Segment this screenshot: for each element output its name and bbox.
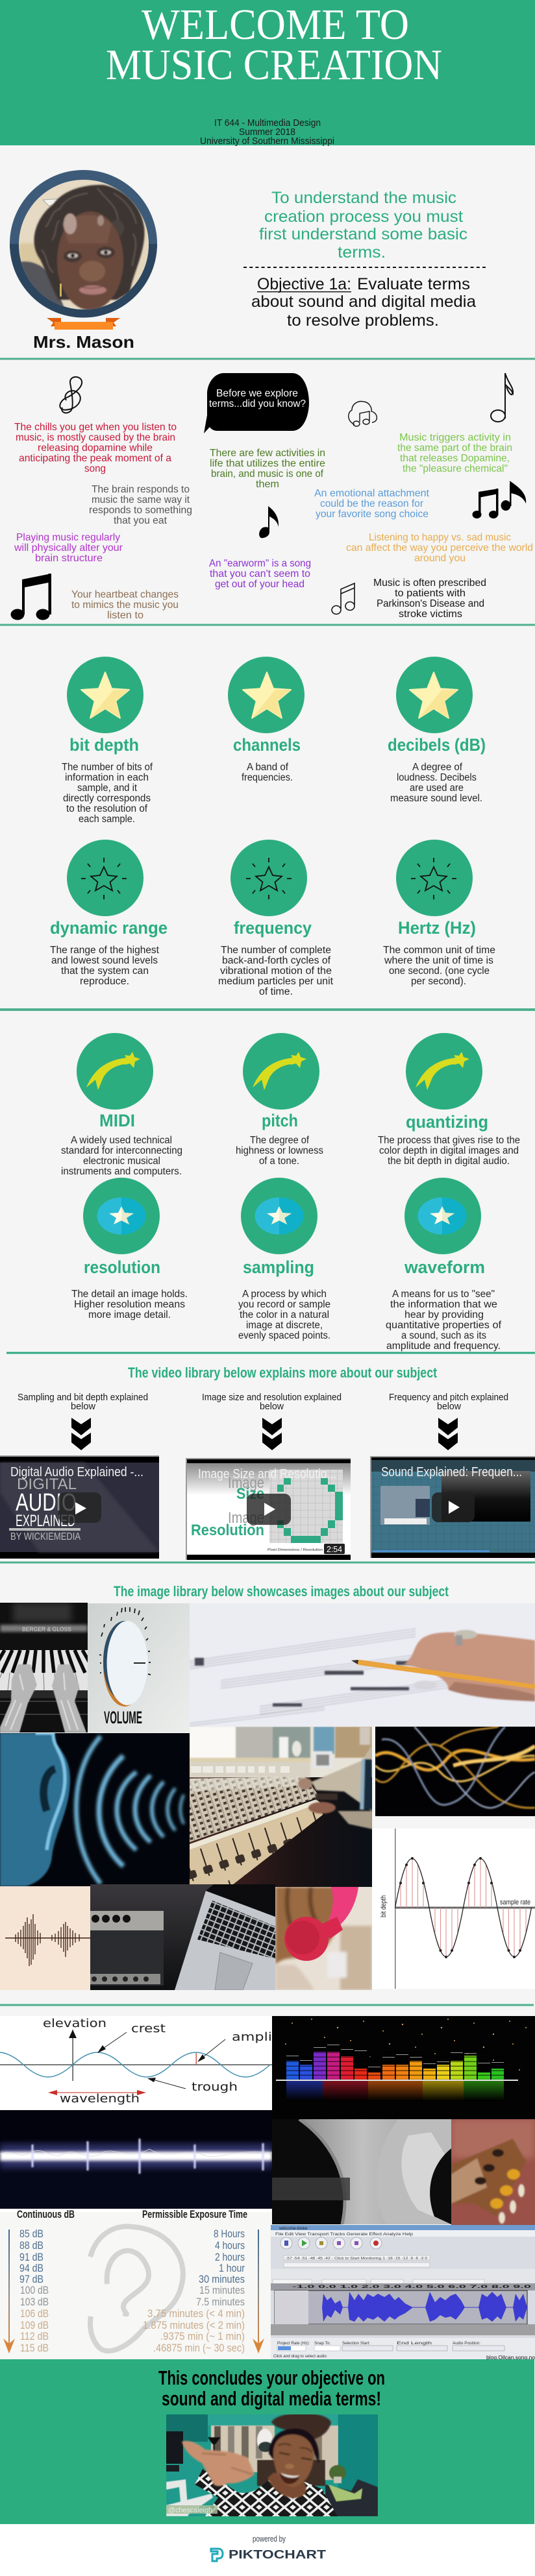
table image: permissible exposure time: 3.75 minutes (< 4 min) [147,2307,245,2320]
fact: chills: The chills you get when you listen to [14,422,177,433]
fact: brain responds: that you eat [114,515,168,526]
table image: permissible exposure time: Continuous dB [17,2208,75,2220]
icon: beamed notes filled [10,574,51,620]
table image: permissible exposure time: 15 minutes [199,2284,245,2296]
definition: more image detail. [88,1309,171,1320]
definition: The range of the highest [50,945,160,956]
course details: IT 644 - Multimedia Design [214,117,321,128]
fact: emotional attachment: An emotional attachment [314,488,430,499]
definition [50,945,160,987]
table image: permissible exposure time: 7.5 minutes [196,2296,245,2308]
fact: dopamine: Music triggers activity in [399,432,511,443]
panel: header [0,0,535,147]
definition: Higher resolution means [74,1299,185,1310]
powered by: powered by [253,2534,286,2544]
caption: video 2 [202,1392,342,1412]
definition: and lowest sound levels [51,955,158,966]
fact: earworm: An "earworm" is a song [209,558,311,569]
icon: blue star badge [241,1178,317,1254]
fact: playing music: Playing music regularly [16,532,120,543]
panel: term sampling [238,1178,330,1341]
definition: you record or sample [238,1299,330,1310]
definition: per second). [411,976,466,987]
definition: electronic musical [83,1156,160,1167]
fact: brain responds [89,484,192,526]
icon: pair of notes [473,481,526,518]
diagram image: wave anatomy: ampli [232,2030,272,2044]
definition: reproduce. [80,976,129,987]
table image: permissible exposure time: 97 dB [19,2273,44,2285]
table image: permissible exposure time: 112 dB [20,2330,49,2342]
definition [383,945,495,987]
definition: A band of [247,762,289,773]
video thumbnail: image size and resolution: Pixel Dimensions / Resolution [268,1548,323,1552]
panel: term MIDI [61,1033,182,1177]
fact: playing music [14,532,123,564]
fact: happy vs sad: Listening to happy vs. sad music [369,532,511,543]
instructor name: Mrs. Mason [33,332,134,352]
piktochart wordmark: PIKTOCHART [229,2548,326,2561]
icon: outline star badge [67,840,143,916]
icon: ribbon [47,318,120,330]
fact: heartbeat [71,589,179,621]
definition: loudness. Decibels [397,772,477,783]
diagram image: wave anatomy: elevation [43,2017,106,2030]
title [106,1,442,89]
definition: A widely used technical [71,1135,172,1146]
definition: instruments and computers. [61,1166,182,1177]
diagram image: wave anatomy: crest [131,2022,166,2035]
table image: permissible exposure time: 1.875 minutes (< 2 min) [143,2319,245,2331]
photo: golden sound waves [375,1727,535,1816]
video thumbnail: digital audio explained: DIGITAL [17,1476,77,1493]
icon: blue star badge [404,1178,481,1254]
definition: The detail an image holds. [71,1289,188,1300]
definition [378,1135,520,1167]
panel: did you know facts [10,373,533,621]
fact: chills: song [84,463,106,474]
definition [61,1135,182,1177]
table image: permissible exposure time: .46875 min (~ 30 sec) [153,2342,245,2354]
diagram image: wave anatomy [0,2016,272,2110]
definition: A means for us to "see" [392,1289,495,1300]
definition: medium particles per unit [218,976,334,987]
text: intro: creation process you must [264,208,463,226]
definition: a sound, such as its [401,1330,486,1341]
photo: piano hands: BERGER & GLOSS [22,1626,71,1633]
fact: prescribed: Music is often prescribed [373,577,486,589]
photo: laptop and audio mixer [90,1884,275,1990]
fact: brain responds: music the same way it [92,494,190,505]
photo: equalizer [272,2016,535,2119]
definition: The common unit of time [383,945,495,956]
definition: the information that we [390,1299,497,1310]
term heading: waveform [404,1258,485,1277]
text: intro [259,189,467,261]
term heading: dynamic range [50,918,168,938]
icon: outline star badge [230,840,307,916]
panel: term pitch [236,1033,323,1167]
photo: volume knob [88,1603,190,1732]
panel: footer [0,2524,535,2576]
caption: video 1 [18,1392,148,1412]
photo: guitar headstock [451,2119,535,2225]
video thumbnail: sound explained [370,1456,535,1558]
icon: outline star badge [396,840,473,916]
caption: video 3: below [437,1402,462,1412]
fact: happy vs sad: around you [414,553,466,564]
fact: playing music: will physically alter your [14,542,123,553]
definition: A degree of [412,762,463,773]
video thumbnail: image size and resolution [186,1458,351,1560]
video thumbnail: digital audio explained [0,1455,159,1559]
panel: term quantizing [378,1033,520,1167]
video thumbnail: image size and resolution: Image [228,1509,264,1527]
screenshot: audacity editor: blog.Oilcan.song.no [486,2355,535,2361]
definition [218,945,334,997]
definition: information in each [65,772,149,783]
table image: permissible exposure time: 94 dB [19,2262,44,2274]
term heading: sampling [243,1258,314,1277]
photo: beige sound wave [0,1886,90,1990]
text: objective: to resolve problems. [287,311,439,330]
course details [200,117,334,147]
term heading: resolution [84,1258,160,1277]
text: intro: terms. [338,243,386,261]
panel: term bit depth [62,657,153,825]
fact: entire brain [210,448,325,490]
definition: A process by which [242,1289,327,1300]
screenshot: audacity editor: Snap To: [314,2342,330,2346]
table image: permissible exposure time: 4 hours [215,2239,245,2252]
video thumbnail: image size and resolution: Resolution [191,1522,264,1539]
definition: The degree of [250,1135,310,1146]
icon: quaver center [259,506,279,538]
fact: prescribed: Parkinson's Disease and [377,598,484,609]
definition: the color in a natural [240,1309,329,1320]
definition [236,1135,323,1167]
definition: back-and-forth cycles of [222,955,331,966]
text: intro: first understand some basic [259,225,467,243]
icon: outlined note [491,373,513,422]
photo: woman waving [166,2414,378,2516]
table image: permissible exposure time: 109 dB [20,2319,49,2331]
fact: brain responds: responds to something [89,505,192,516]
photo: mixing console [190,1727,372,1887]
caption: video 2: Image size and resolution explained [202,1392,342,1403]
definition: vibrational motion of the [220,966,332,977]
caption: video 2: below [260,1402,284,1412]
screenshot: audacity editor: -57 -54 -51 -48 -45 -42 - Click to Start Monitoring 1 -18 -15 -12 -9 -6 -3 0 [286,2257,427,2261]
fact: dopamine: the "pleasure chemical" [403,463,508,474]
text: objective: Objective 1a: [257,275,351,293]
fact: chills: anticipating the peak moment of a [19,453,171,464]
table image: permissible exposure time [0,2208,271,2354]
caption: video 1: Sampling and bit depth explained [18,1392,148,1403]
definition: The number of bits of [62,762,153,773]
text: objective [251,275,476,330]
definition [242,762,293,783]
conclusion heading: sound and digital media terms! [162,2387,381,2410]
conclusion heading: This concludes your objective on [158,2366,385,2389]
fact: happy vs sad [346,532,533,564]
term heading: MIDI [99,1111,135,1130]
heading: image library: The image library below showcases images about our subject [114,1583,449,1599]
definition: image at discrete, [246,1320,323,1331]
panel: term hertz [383,840,495,987]
video thumbnail: image size and resolution: Image [228,1474,264,1492]
term heading: decibels (dB) [388,735,486,755]
icon: treble clef [60,377,82,413]
panel: conclusion [0,2359,534,2524]
fact: prescribed: stroke victims [399,609,462,620]
definition: The process that gives rise to the [378,1135,520,1146]
heading: video library: The video library below explains more about our subject [128,1365,438,1381]
photo: woman waving: @chescaleigh [168,2507,212,2514]
fact: emotional attachment [314,488,430,520]
fact: prescribed [373,577,486,620]
diagram image: wave anatomy: wavelength [60,2092,140,2106]
term heading: frequency [234,918,312,938]
text: intro: To understand the music [271,189,456,207]
arrow: chevrons 2 [262,1418,282,1450]
definition: that the system can [61,966,149,977]
screenshot: audacity editor: Project Rate (Hz): [277,2342,310,2346]
fact: earworm: that you can't seem to [210,568,310,579]
text: objective: about sound and digital media [251,293,476,311]
term heading: bit depth [69,735,139,755]
conclusion heading [158,2366,385,2410]
fact: heartbeat: to mimics the music you [71,600,179,611]
panel: term frequency [218,840,334,997]
title: MUSIC CREATION [106,41,442,89]
screenshot: audacity editor: Audio Position: [453,2342,480,2346]
definition [390,762,482,804]
definition: evenly spaced points. [238,1330,330,1341]
term heading: channels [233,735,301,755]
icon: comet badge [77,1033,153,1110]
course details: Summer 2018 [239,127,295,138]
table image: permissible exposure time: 2 hours [215,2251,245,2263]
video thumbnail: digital audio explained: BY WICKIEMEDIA [10,1531,81,1542]
photo: red headphones [275,1887,372,1990]
screenshot: audacity editor: End Length [397,2342,432,2346]
panel: term dynamic range [50,840,168,987]
video thumbnail: digital audio explained: Digital Audio Explained -... [10,1465,143,1479]
fact: entire brain: them [256,479,279,490]
definition: color depth in digital images and [379,1145,519,1156]
panel: term resolution [71,1178,188,1320]
term heading: quantizing [406,1112,488,1132]
definition: the bit depth in digital audio. [388,1156,510,1167]
definition: hear by providing [404,1309,484,1320]
icon: star badge [228,657,305,733]
fact: chills: releasing dopamine while [38,443,153,454]
callout: speech bubble: terms...did you know? [209,398,306,409]
table image: permissible exposure time: 91 dB [19,2251,44,2263]
icon: cloud with notes [349,402,377,426]
arrow: chevrons 1 [71,1418,91,1450]
definition: amplitude and frequency. [386,1341,501,1352]
table image: permissible exposure time: 88 dB [19,2239,44,2252]
fact: dopamine: that releases Dopamine, [400,453,510,464]
fact: dopamine [397,432,512,474]
definition: each sample. [79,814,135,825]
definition: frequencies. [242,772,293,783]
definition: where the unit of time is [384,955,493,966]
photo: sheet music and pencil [190,1603,535,1727]
fact: happy vs sad: can affect the way you perceive the world [346,542,533,553]
fact: dopamine: the same part of the brain [397,443,512,454]
fact: heartbeat: Your heartbeat changes [71,589,179,600]
chart image: sampled sine wave [372,1829,535,1989]
fact: emotional attachment: your favorite song choice [316,509,429,520]
callout: speech bubble: Before we explore [216,388,298,399]
fact: earworm: get out of your head [215,579,305,590]
panel: term channels [228,657,305,783]
table image: permissible exposure time: 100 dB [20,2284,49,2296]
diagram image: wave anatomy: trough [192,2080,238,2094]
screenshot: audacity editor: -1.0 0.0 1.0 2.0 3.0 4.0 5.0 6.0 7.0 8.0 9.0 [292,2285,532,2289]
definition [71,1289,188,1320]
panel: term decibels [388,657,486,804]
callout: speech bubble [204,373,309,433]
fact: prescribed: to patients with [395,588,466,599]
video thumbnail: digital audio explained: EXPLAINED [16,1512,75,1530]
definition: sample, and it [77,783,138,794]
fact: entire brain: There are few activities in [210,448,325,459]
definition: quantitative properties of [386,1320,502,1331]
fact: heartbeat: listen to [107,610,143,621]
chart image: sampled sine wave: bit depth [380,1895,388,1917]
table image: permissible exposure time: 106 dB [20,2307,49,2320]
term heading: pitch [262,1111,298,1130]
definition: The number of complete [221,945,331,956]
table image: permissible exposure time: 8 Hours [214,2228,245,2240]
arrow: chevrons 3 [438,1418,458,1450]
fact: earworm [209,558,311,590]
definition: to the resolution of [66,803,148,814]
photo: ear and sound waves [0,1733,190,1886]
table image: permissible exposure time: 85 dB [19,2228,44,2240]
photo: volume knob: VOLUME [104,1708,142,1727]
definition: of a tone. [259,1156,299,1167]
caption: video 3 [389,1392,508,1412]
definition: one second. (one cycle [389,966,490,977]
icon: piktochart logo [211,2549,223,2561]
icon: star badge [67,657,143,733]
table image: permissible exposure time: 30 minutes [199,2273,245,2285]
definition: of time. [259,986,293,997]
table image: permissible exposure time: 1 hour [219,2262,245,2274]
table image: permissible exposure time: 103 dB [20,2296,49,2308]
fact: entire brain: brain, and music is one of [211,468,324,480]
term heading: Hertz (Hz) [398,918,476,938]
screenshot: audacity editor: Click and drag to select audio [273,2355,327,2359]
title: WELCOME TO [142,1,409,49]
icon: comet badge [243,1033,319,1110]
fact: brain responds: The brain responds to [92,484,190,495]
definition [386,1289,502,1352]
fact: entire brain: life that utilizes the entire [210,458,325,469]
video thumbnail: image size and resolution: 2:54 [327,1544,342,1554]
caption: video 3: Frequency and pitch explained [389,1392,508,1403]
table image: permissible exposure time: .9375 min (~ 1 min) [160,2330,245,2342]
screenshot: audacity editor: Selection Start: [342,2342,370,2346]
screenshot: audacity editor: welcome-bloke [279,2226,308,2231]
caption: video 1: below [71,1402,96,1412]
definition: highness or lowness [236,1145,323,1156]
icon: star badge [396,657,473,733]
panel: instructor portrait [10,170,157,317]
dress [195,2469,338,2516]
fact: playing music: brain structure [35,553,103,564]
definition: standard for interconnecting [61,1145,182,1156]
icon: comet badge [406,1033,482,1110]
photo: piano hands [0,1603,88,1732]
definition: directly corresponds [63,793,151,804]
definition: are used are [410,783,464,794]
video thumbnail: digital audio explained: AUDIO [16,1489,77,1516]
photo: reel to reel [272,2119,451,2224]
definition: measure sound level. [390,793,482,804]
fact: emotional attachment: could be the reason for [320,498,424,509]
icon: outlined beamed note [332,583,355,614]
table image: permissible exposure time: 115 dB [20,2342,49,2354]
definition [62,762,153,825]
screenshot: audacity editor: File Edit View Transport Tracks Generate Effect Analyze Help [275,2232,413,2237]
definition [238,1289,330,1341]
screenshot: audacity editor [271,2225,535,2361]
fact: chills: music, is mostly caused by the brain [16,432,175,443]
panel: term waveform [386,1178,502,1352]
icon: blue star badge [83,1178,160,1254]
video thumbnail: image size and resolution: Size [236,1485,264,1503]
photo: waveform on dark [0,2110,272,2209]
course details: University of Southern Mississippi [200,136,334,147]
text: objective: Evaluate terms [357,275,470,293]
fact: chills [14,422,177,474]
